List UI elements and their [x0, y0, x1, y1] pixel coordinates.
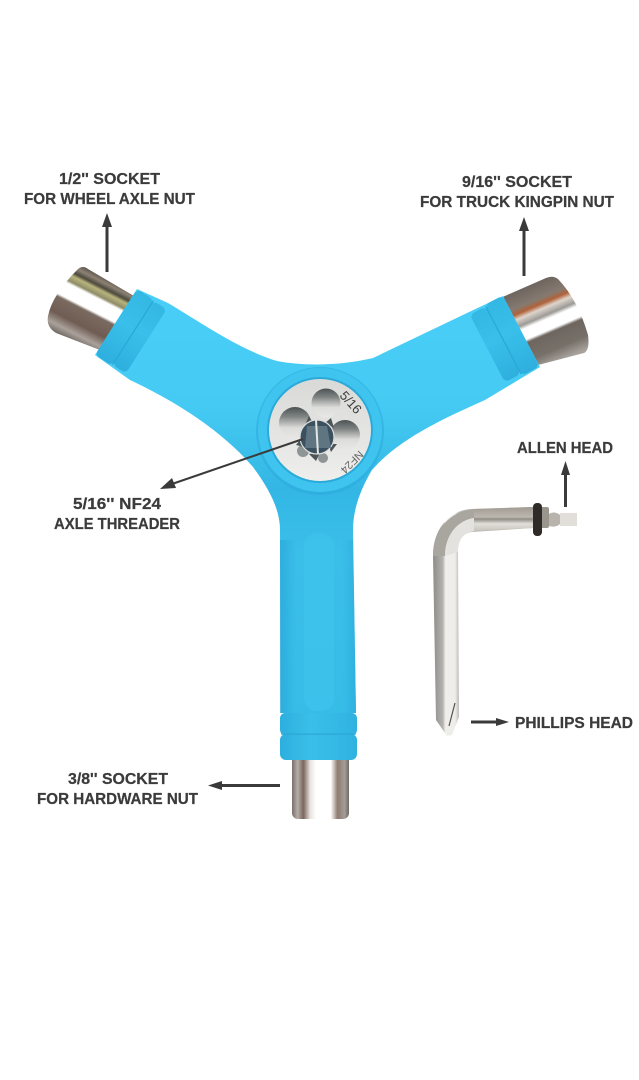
top lobe: [312, 388, 340, 418]
engraving 5/16: 5/16: [337, 388, 365, 417]
center hole teeth: [296, 416, 337, 461]
L-shaped hex key: [433, 503, 577, 736]
threading die: [267, 377, 373, 483]
phillips tip shadow: [449, 703, 455, 726]
label: axle threader: [54, 496, 180, 533]
label: phillips head: PHILLIPS HEAD: [515, 715, 633, 732]
right grip band: [469, 296, 539, 384]
center slit: [316, 420, 318, 454]
arrow: wheel axle nut: [102, 213, 112, 272]
wrench corner bevel: [433, 509, 474, 556]
blue Y-shaped handle: [95, 289, 540, 760]
label: 9/16 socket: 9/16'' SOCKET: [462, 174, 572, 191]
label: 3/8 socket: 3/8'' SOCKET: [68, 771, 168, 788]
wrench corner highlight: [445, 518, 474, 556]
ring outer shadow: [256, 367, 384, 495]
ring: [258, 368, 382, 492]
o-ring: [533, 503, 542, 536]
wrench horizontal arm: [474, 507, 533, 531]
arrow: phillips head: [471, 718, 509, 726]
collar: [540, 507, 549, 528]
bottom grip band upper: [280, 713, 357, 735]
arrow: axle threader: [160, 439, 303, 489]
label: 1/2 socket: 1/2'' SOCKET: [59, 171, 160, 188]
label: 1/2 socket: [24, 171, 195, 208]
stem left shading: [280, 540, 296, 713]
bottom socket 3/8: [292, 752, 349, 819]
hex tip: [560, 513, 577, 526]
arrow: hardware nut: [208, 781, 280, 790]
handle body: [95, 289, 540, 713]
center shading: [305, 426, 331, 448]
stem right shading: [342, 540, 356, 713]
label: axle threader: AXLE THREADER: [54, 516, 180, 533]
right lobe: [330, 420, 360, 450]
right socket 9/16: [498, 277, 588, 365]
ball taper: [549, 512, 560, 527]
metal disc: [269, 379, 371, 481]
engraving NF24: NF24: [338, 448, 365, 475]
left socket 1/2: [48, 267, 134, 350]
arrow: truck kingpin nut: [519, 217, 529, 276]
left lobe: [279, 407, 311, 439]
bottom grip band lower: [280, 734, 357, 760]
left grip band: [95, 289, 167, 374]
label: 1/2 socket: FOR WHEEL AXLE NUT: [24, 191, 195, 208]
label: axle threader: 5/16'' NF24: [73, 496, 161, 513]
label: 9/16 socket: FOR TRUCK KINGPIN NUT: [420, 194, 614, 211]
bottom band groove: [281, 734, 356, 735]
center hole: [300, 420, 334, 454]
label: 9/16 socket: [420, 174, 614, 211]
label: 3/8 socket: FOR HARDWARE NUT: [37, 791, 198, 808]
arrow: allen head: [561, 461, 570, 507]
lower lobe: [318, 453, 328, 463]
stem grip recess: [304, 533, 334, 711]
label: allen head: ALLEN HEAD: [517, 440, 613, 457]
wrench shaft: [433, 507, 533, 736]
lower left lobe: [297, 445, 309, 457]
ring inner shadow: [267, 377, 373, 483]
label: 3/8 socket: [37, 771, 198, 808]
